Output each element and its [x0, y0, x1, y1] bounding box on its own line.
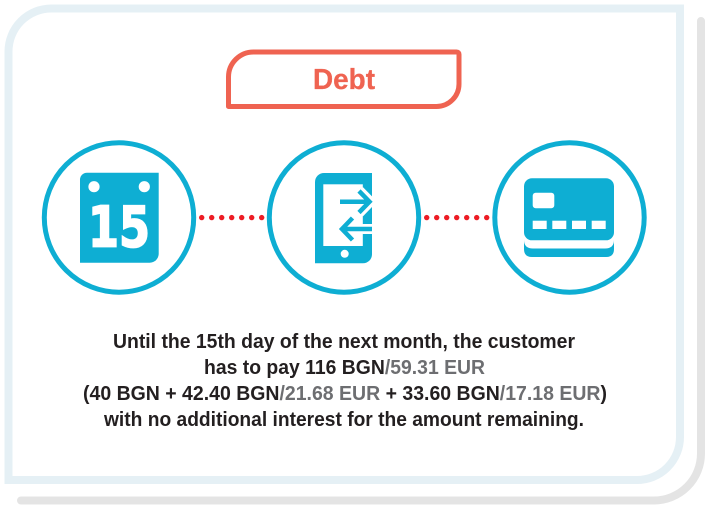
text block: debt explanation: Until the 15th day of the next month, the customer [113, 331, 575, 353]
icon: bank card [495, 143, 644, 292]
icon: calendar showing day 15 [44, 143, 194, 292]
icon: calendar showing day 15: 15 [88, 195, 150, 260]
text block: debt explanation: (40 BGN + 42.40 BGN/21.68 EUR + 33.60 BGN/17.18 EUR) [83, 383, 607, 405]
icon: phone with transfer arrows [269, 143, 419, 292]
dotted connector: phone to card [424, 215, 489, 220]
heading badge: Debt: Debt [313, 64, 375, 96]
text block: debt explanation: with no additional interest for the amount remaining. [103, 409, 584, 431]
heading badge: Debt [228, 52, 459, 106]
text block: debt explanation [83, 331, 607, 431]
dotted connector: calendar to phone [199, 215, 264, 220]
text block: debt explanation: has to pay 116 BGN/59.31 EUR [204, 357, 486, 379]
